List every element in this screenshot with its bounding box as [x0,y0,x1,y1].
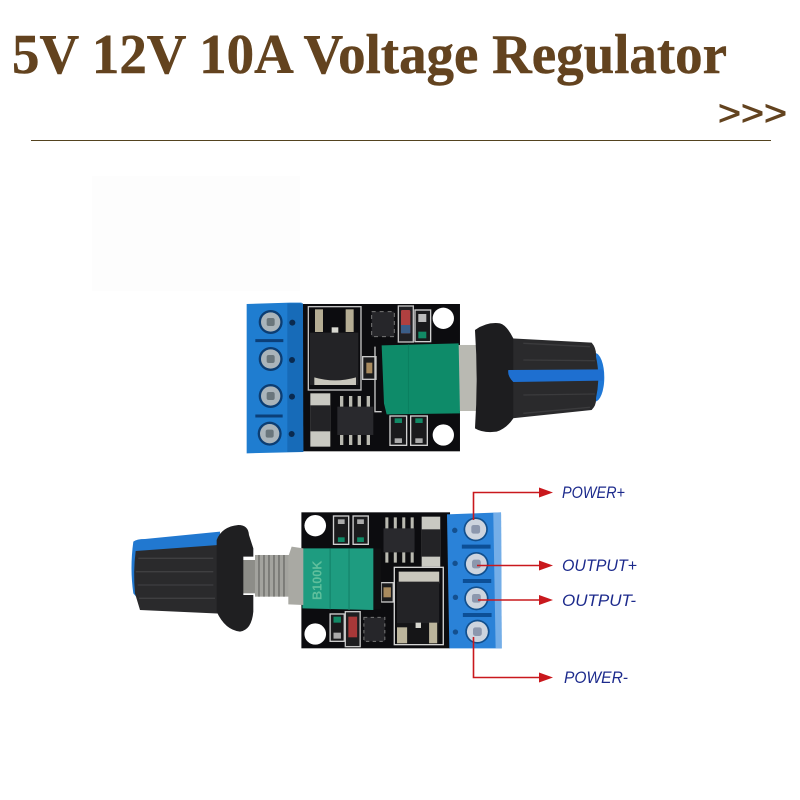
title: 5V 12V 10A Voltage Regulator [12,24,727,86]
potentiometer [302,548,381,610]
icon: chevrons: >>> [718,94,787,133]
blue terminal block [247,303,303,453]
potentiometer [382,343,477,414]
arrow: power minus [474,637,553,682]
bottom regulator module [301,512,502,648]
circuit board [302,304,460,451]
circuit board [301,512,450,648]
label: output plus: OUTPUT+ [562,556,637,575]
knob and shaft of bottom module [131,525,303,632]
control knob [475,323,604,432]
label: power plus: POWER+ [562,483,625,502]
control knob [131,525,253,632]
blue terminal block [447,512,502,648]
threaded shaft and bracket [242,547,303,605]
label: power minus: POWER- [564,668,628,687]
arrow: output minus [478,595,553,605]
potentiometer: B100K [309,560,324,600]
arrow: power plus [474,488,553,520]
top regulator module [247,303,604,453]
red pointer arrows [474,488,553,682]
terminal labels [562,483,637,687]
label: output minus: OUTPUT- [562,591,636,610]
arrow: output plus [477,560,553,570]
